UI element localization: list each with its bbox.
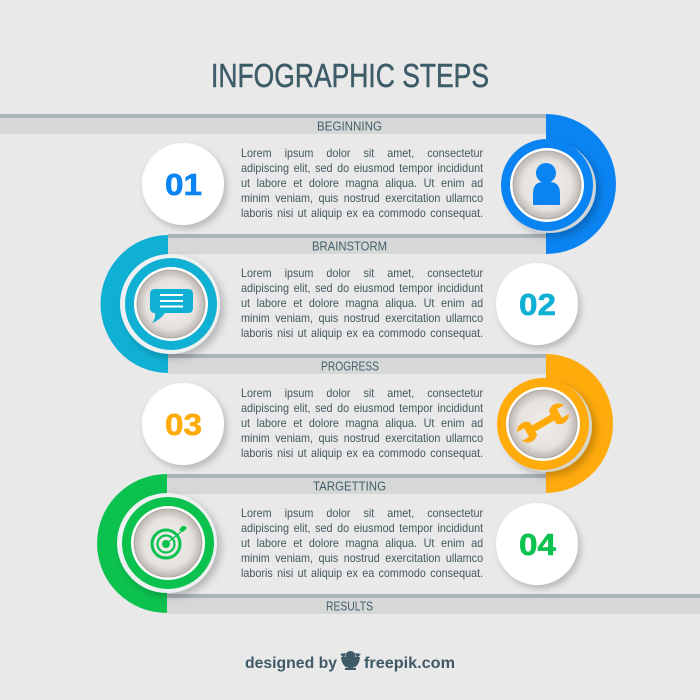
footer credit: freepik.com: [364, 655, 455, 672]
number badge 04: [496, 503, 578, 585]
number badge 03: [142, 383, 224, 465]
text block 3: [241, 386, 485, 462]
footer credit: [245, 651, 455, 672]
medallion: speech bubble icon: [120, 254, 220, 354]
text block 3: adipiscing elit, sed do eiusmod tempor incididunt: [241, 401, 483, 415]
cyan half ring: [101, 235, 168, 373]
text block 4: laboris nisi ut aliquip ex ea commodo consequat.: [241, 566, 483, 580]
text block 3: Lorem ipsum dolor sit amet, consectetur: [241, 386, 483, 400]
text block 3: ut labore et dolore magna aliqua. Ut enim ad: [241, 416, 483, 430]
text block 4: minim veniam, quis nostrud exercitation ullamco: [241, 551, 483, 565]
icon: speech bubble: [150, 289, 193, 323]
header bar: progress: [168, 354, 546, 374]
header bar: brainstorm: [168, 234, 546, 254]
text block 1: minim veniam, quis nostrud exercitation ullamco: [241, 191, 483, 205]
icon: person: [533, 163, 560, 205]
text block 2: minim veniam, quis nostrud exercitation ullamco: [241, 311, 483, 325]
number badge 02: 02: [519, 287, 556, 322]
orange half ring: [546, 354, 613, 493]
text block 3: minim veniam, quis nostrud exercitation ullamco: [241, 431, 483, 445]
header bar: beginning: [0, 114, 546, 134]
step 1: beginning: [0, 114, 616, 254]
step 2: brainstorm: [101, 234, 578, 373]
green half ring: [97, 474, 167, 613]
icon: target: [152, 526, 187, 558]
header bar: targetting: [167, 474, 546, 494]
text block 1: Lorem ipsum dolor sit amet, consectetur: [241, 146, 483, 160]
number badge 04: 04: [519, 527, 557, 562]
title: INFOGRAPHIC STEPS: [211, 57, 489, 94]
text block 4: ut labore et dolore magna aliqua. Ut enim ad: [241, 536, 483, 550]
text block 1: ut labore et dolore magna aliqua. Ut enim ad: [241, 176, 483, 190]
number badge 01: 01: [165, 167, 202, 202]
icon: wrench: [514, 400, 572, 446]
step 3: progress: [142, 354, 613, 493]
medallion: person icon: [501, 139, 596, 233]
header bar: beginning: BEGINNING: [317, 120, 382, 134]
text block 1: laboris nisi ut aliquip ex ea commodo consequat.: [241, 206, 483, 220]
results bar: RESULTS: [326, 600, 373, 614]
header bar: progress: PROGRESS: [321, 360, 379, 374]
blue half ring: [546, 114, 616, 254]
medallion: target icon: [117, 493, 217, 593]
icon: freepik crown: [340, 651, 361, 670]
step 4: targetting: [97, 474, 578, 613]
text block 4: [241, 506, 485, 582]
text block 2: [241, 266, 485, 342]
text block 2: Lorem ipsum dolor sit amet, consectetur: [241, 266, 483, 280]
text block 4: Lorem ipsum dolor sit amet, consectetur: [241, 506, 483, 520]
footer credit: designed by: [245, 655, 337, 672]
medallion: wrench icon: [497, 378, 592, 472]
number badge 01: [142, 143, 224, 225]
results bar: [167, 594, 700, 614]
header bar: brainstorm: BRAINSTORM: [312, 240, 387, 254]
number badge 02: [496, 263, 578, 345]
text block 3: laboris nisi ut aliquip ex ea commodo consequat.: [241, 446, 483, 460]
text block 2: adipiscing elit, sed do eiusmod tempor incididunt: [241, 281, 483, 295]
text block 1: [241, 146, 485, 222]
text block 2: laboris nisi ut aliquip ex ea commodo consequat.: [241, 326, 483, 340]
number badge 03: 03: [165, 407, 202, 442]
text block 2: ut labore et dolore magna aliqua. Ut enim ad: [241, 296, 483, 310]
header bar: targetting: TARGETTING: [313, 480, 386, 494]
text block 4: adipiscing elit, sed do eiusmod tempor incididunt: [241, 521, 483, 535]
text block 1: adipiscing elit, sed do eiusmod tempor incididunt: [241, 161, 483, 175]
